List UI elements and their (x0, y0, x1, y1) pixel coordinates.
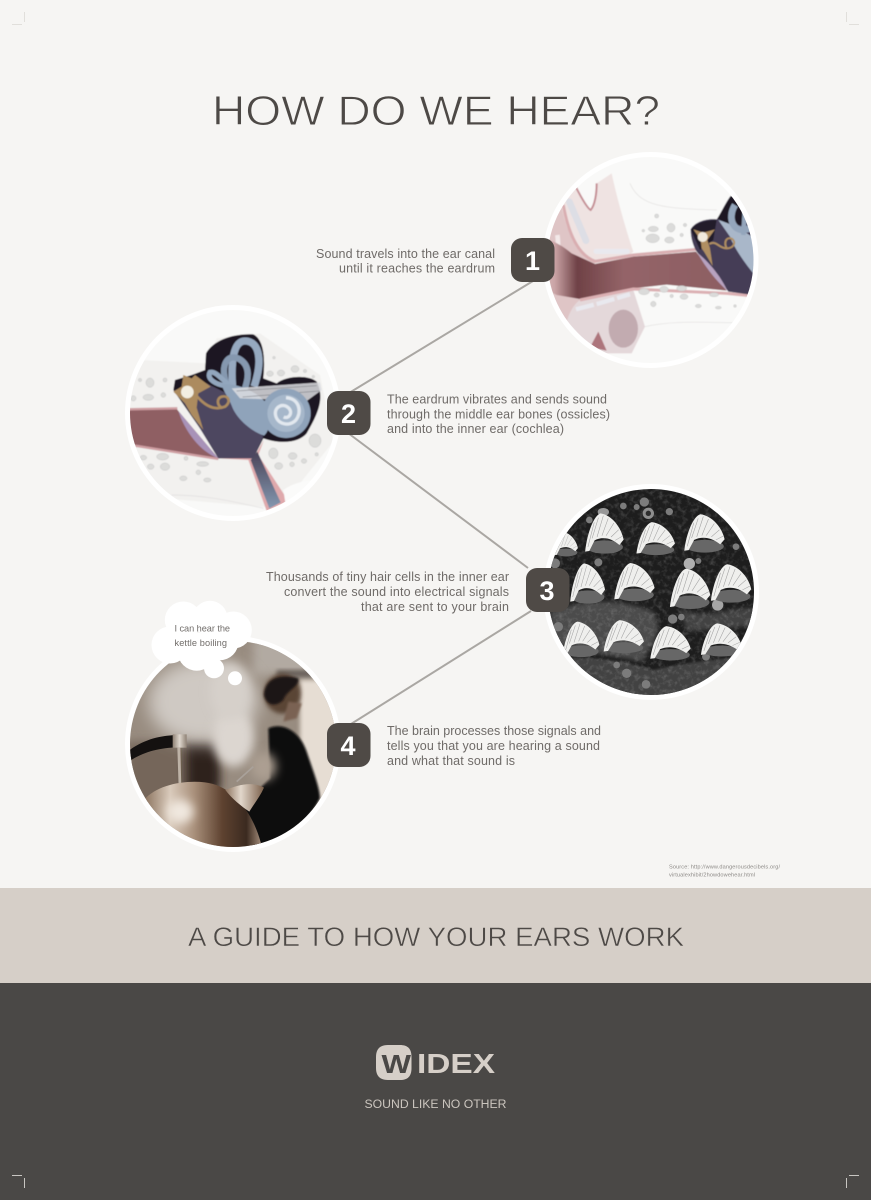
text: step 3 description: that are sent to your brain (361, 600, 509, 614)
callout: thought bubble: kettle boiling (174, 638, 227, 648)
panel: guide banner: A GUIDE TO HOW YOUR EARS WORK (188, 922, 684, 952)
step 3 number badge: 3 (539, 576, 555, 606)
text: step 3 description: Thousands of tiny hair cells in the inner ear (266, 570, 509, 584)
source note: Source: http://www.dangerousdecibels.org/ (669, 864, 780, 870)
callout: thought bubble: I can hear the (174, 624, 230, 634)
step 2 number badge: 2 (341, 399, 356, 429)
text: step 3 description: convert the sound into electrical signals (284, 585, 509, 599)
panel: step 2 middle and inner ear illustration (125, 305, 343, 522)
panel: guide banner (0, 888, 871, 983)
crop marks: bottom (12, 1176, 859, 1188)
text: step 2 description: The eardrum vibrates and sends sound (387, 392, 607, 406)
logo: Widex: IDEX (417, 1048, 495, 1079)
title: HOW DO WE HEAR? (212, 87, 660, 134)
panel: step 1 ear canal illustration (540, 152, 760, 368)
logo: Widex: W (382, 1049, 412, 1079)
panel: step 4 kettle and listener photo (125, 636, 343, 855)
step 4 number badge: 4 (340, 731, 356, 761)
text: step 4 description: and what that sound is (387, 754, 515, 768)
step 4 number badge (327, 723, 370, 767)
panel: footer (0, 983, 871, 1200)
text: step 1 description: Sound travels into the ear canal (316, 247, 495, 261)
connector lines between the steps (348, 281, 533, 724)
text: step 2 description: and into the inner ear (cochlea) (387, 422, 564, 436)
crop marks: top (12, 12, 859, 24)
step 3 number badge (526, 568, 570, 612)
panel: step 3 hair cells micrograph (543, 484, 760, 702)
text: step 2 description: through the middle ear bones (ossicles) (387, 408, 610, 422)
logo: Widex (376, 1045, 495, 1080)
text: step 1 description: until it reaches the eardrum (339, 262, 495, 276)
source note: virtualexhibit/2howdowehear.html (669, 872, 755, 878)
step 1 number badge: 1 (525, 246, 540, 276)
step 2 number badge (327, 391, 370, 435)
text: step 4 description: The brain processes those signals and (387, 724, 601, 738)
step 1 number badge (511, 238, 554, 282)
text: step 4 description: tells you that you are hearing a sound (387, 739, 600, 753)
tagline: SOUND LIKE NO OTHER (364, 1099, 506, 1111)
callout: thought bubble (152, 601, 252, 685)
page background (0, 0, 871, 888)
